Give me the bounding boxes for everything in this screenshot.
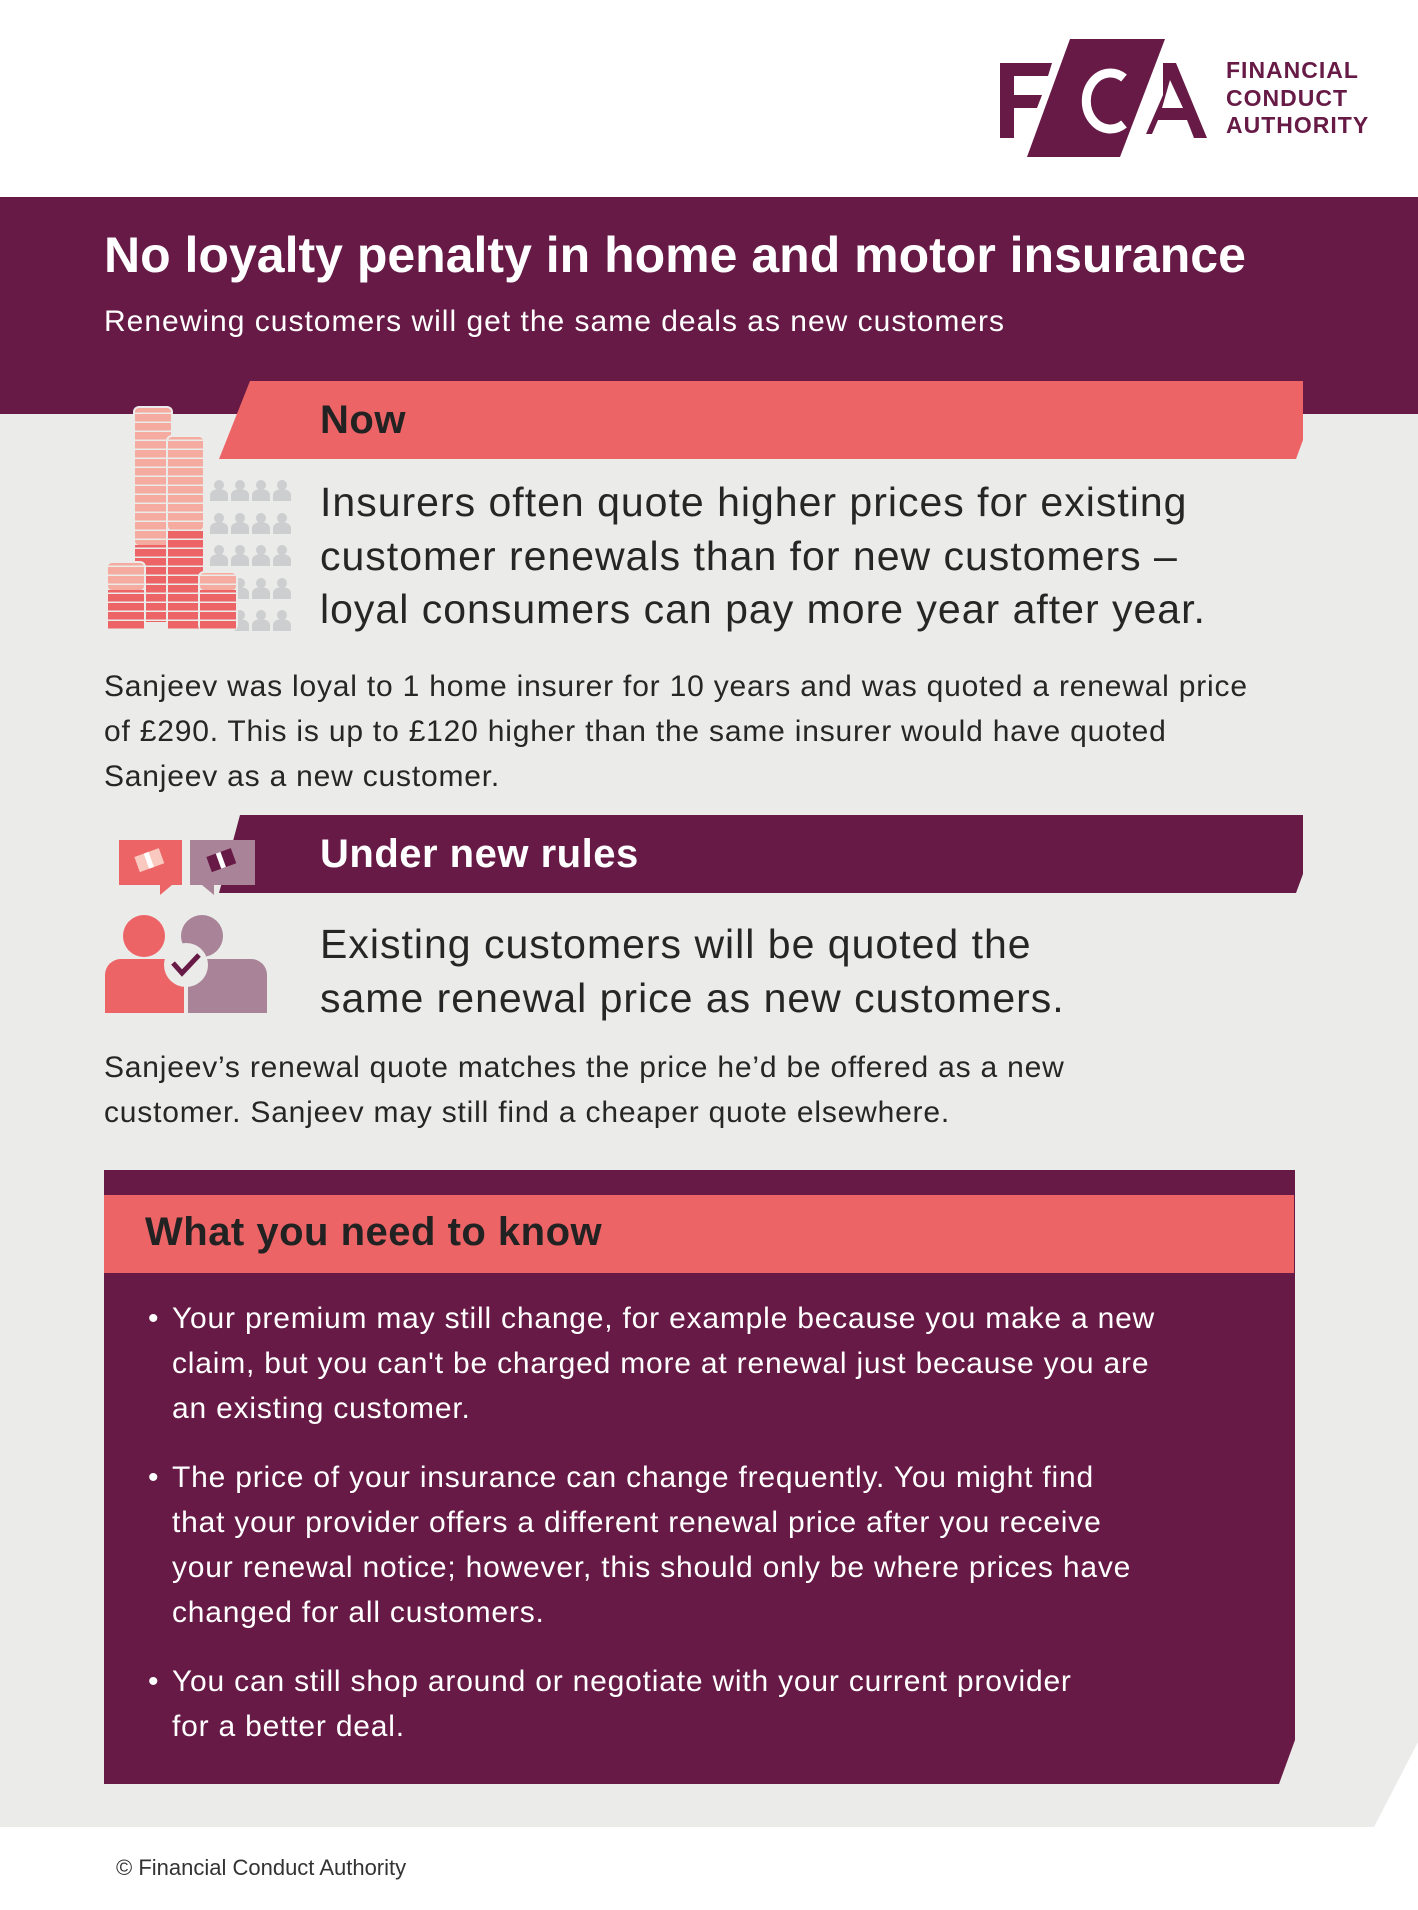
- panel: what you need to know: You can still shop around or negotiate with your current provider: [172, 1665, 1072, 1698]
- text: Sanjeev example: [104, 670, 1248, 793]
- panel: what you need to know: [104, 1170, 1295, 1784]
- bullet list: •: [148, 1302, 159, 1335]
- bullet list: •: [148, 1461, 159, 1494]
- subtitle: Renewing customers will get the same deals as new customers: [104, 305, 1005, 338]
- text: new rules example: customer. Sanjeev may still find a cheaper quote elsewhere.: [104, 1096, 950, 1129]
- title: No loyalty penalty in home and motor insurance: [104, 227, 1246, 283]
- panel: what you need to know: The price of your insurance can change frequently. You might find: [172, 1461, 1094, 1494]
- icon: coin stacks and people: [108, 406, 291, 631]
- banner: Now: [219, 381, 1303, 459]
- panel: what you need to know: an existing customer.: [172, 1392, 471, 1425]
- footer: © Financial Conduct Authority: [116, 1855, 406, 1880]
- banner: Now: Now: [320, 398, 406, 442]
- heading: What you need to know: [145, 1210, 602, 1254]
- icon: two people with speech bubbles: [105, 840, 267, 1013]
- panel: what you need to know: that your provider offers a different renewal price after you receive: [172, 1506, 1102, 1539]
- panel: what you need to know: for a better deal.: [172, 1710, 405, 1743]
- text: now main: Insurers often quote higher prices for existing: [320, 479, 1187, 525]
- people grid: [210, 480, 291, 631]
- text: Sanjeev example: Sanjeev as a new customer.: [104, 760, 500, 793]
- text: new rules example: Sanjeev’s renewal quote matches the price he’d be offered as a new: [104, 1051, 1065, 1084]
- banner: Under new rules: [219, 815, 1303, 893]
- bullet list: [148, 1302, 1155, 1743]
- logo: CONDUCT: [1226, 84, 1348, 110]
- text: Sanjeev example: Sanjeev was loyal to 1 home insurer for 10 years and was quoted a renewal price: [104, 670, 1248, 703]
- text: new rules main: [320, 921, 1065, 1020]
- text: now main: loyal consumers can pay more year after year.: [320, 586, 1206, 632]
- text: now main: [320, 479, 1206, 632]
- panel: what you need to know: your renewal notice; however, this should only be where prices have: [172, 1551, 1131, 1584]
- banner: Under new rules: Under new rules: [320, 832, 639, 876]
- logo: [1000, 39, 1369, 157]
- text: new rules main: same renewal price as new customers.: [320, 974, 1065, 1020]
- logo: AUTHORITY: [1226, 112, 1369, 138]
- logo: FINANCIAL: [1226, 57, 1359, 83]
- panel: what you need to know: changed for all customers.: [172, 1596, 545, 1629]
- text: now main: customer renewals than for new customers –: [320, 532, 1178, 578]
- bullet list: •: [148, 1665, 159, 1698]
- text: Sanjeev example: of £290. This is up to £120 higher than the same insurer would have quoted: [104, 715, 1167, 748]
- panel: what you need to know: Your premium may still change, for example because you make a new: [172, 1302, 1155, 1335]
- text: new rules example: [104, 1051, 1065, 1129]
- panel: what you need to know: claim, but you can't be charged more at renewal just because you are: [172, 1347, 1149, 1380]
- text: new rules main: Existing customers will be quoted the: [320, 921, 1032, 967]
